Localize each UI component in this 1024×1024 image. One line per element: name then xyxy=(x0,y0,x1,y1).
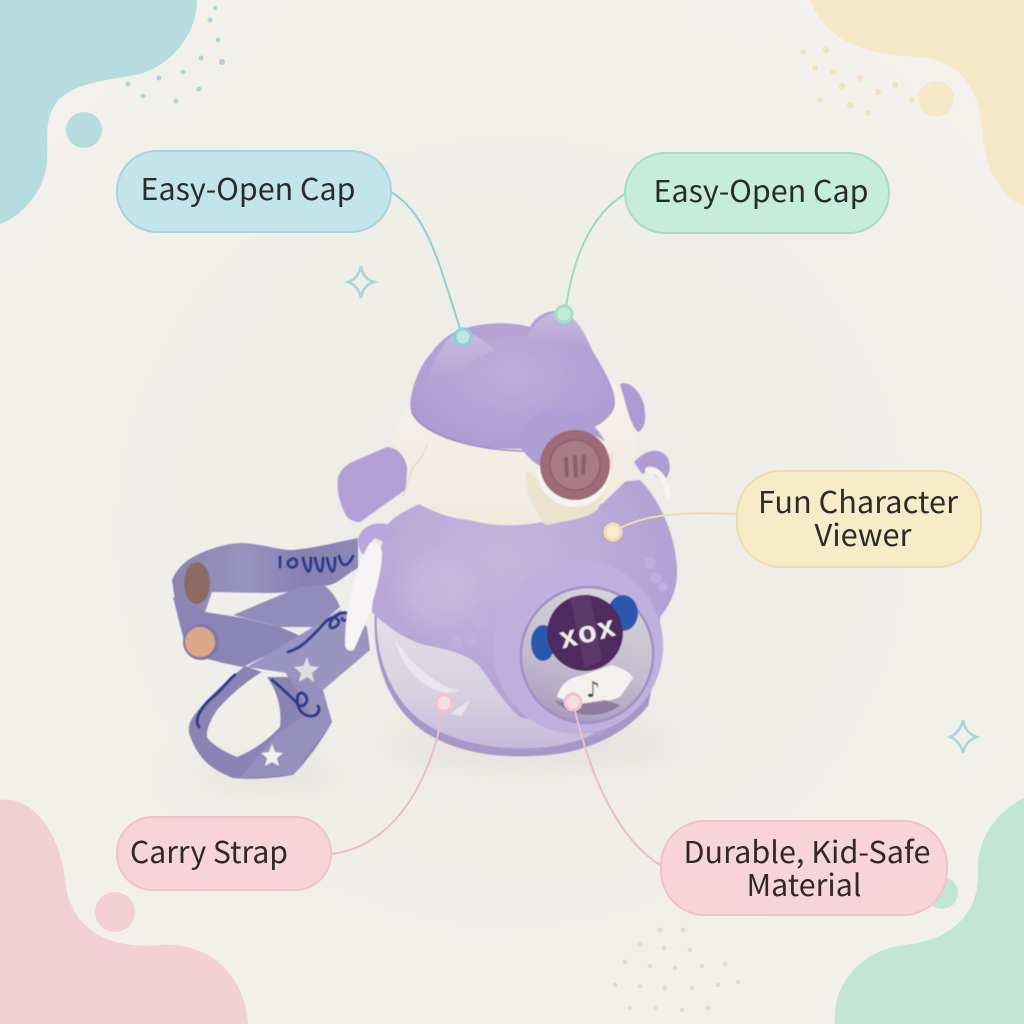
bottle: purple sleeve xyxy=(372,480,677,735)
icon: sparkle right xyxy=(950,720,977,753)
bottle xyxy=(337,311,683,756)
beige clasp xyxy=(526,450,613,525)
strap: lower loop xyxy=(189,666,332,779)
strap: bear prints xyxy=(183,562,219,660)
bottle: bumps xyxy=(451,557,668,649)
label: Durable, Kid-Safe Material: Material xyxy=(746,861,862,905)
left hinge xyxy=(337,447,407,522)
label: Fun Character Viewer xyxy=(737,471,981,567)
lid lip xyxy=(412,413,525,451)
strap: twist xyxy=(247,610,370,690)
connector: durable material xyxy=(565,694,660,865)
blob: bottom right green xyxy=(835,798,1024,1024)
bottle: clear vessel xyxy=(377,615,660,748)
connector: top right cap xyxy=(556,194,625,322)
blob: top left blue xyxy=(0,0,225,224)
headphones xyxy=(531,595,638,661)
strap: blue script xyxy=(197,556,353,727)
label: Fun Character Viewer: Viewer xyxy=(814,511,912,555)
strap: stars xyxy=(261,657,319,766)
viewer window xyxy=(506,572,668,738)
icon: sparkle left xyxy=(348,266,374,298)
strap: fold xyxy=(233,585,340,627)
blob: top right yellow xyxy=(800,0,1024,207)
lid ear left xyxy=(430,332,495,384)
character xyxy=(531,594,638,715)
lower body shadow xyxy=(555,700,620,715)
head reflection xyxy=(570,594,602,668)
dot pattern: bottom xyxy=(612,928,740,1012)
label: Easy-Open Cap left xyxy=(117,151,391,232)
button xyxy=(540,430,610,500)
collar step xyxy=(403,444,427,497)
label: Easy-Open Cap left: Easy-Open Cap xyxy=(140,165,356,209)
label: Easy-Open Cap right xyxy=(625,153,889,233)
label: Durable, Kid-Safe Material xyxy=(661,821,947,915)
white clip xyxy=(345,542,382,651)
bottle: metal rim xyxy=(420,505,555,527)
strap: lower fold xyxy=(240,672,332,778)
connector: top left cap xyxy=(391,192,471,345)
label: Fun Character Viewer: Fun Character xyxy=(758,478,958,522)
strap xyxy=(172,538,370,779)
viewer ring xyxy=(473,541,683,753)
blob: bottom left pink xyxy=(0,800,248,1024)
head xyxy=(547,595,623,671)
connector: character viewer xyxy=(605,513,736,540)
button tube xyxy=(518,408,605,466)
label: Carry Strap xyxy=(117,817,331,890)
strap: top band xyxy=(172,538,358,612)
music note: ♪ xyxy=(586,678,600,703)
bottle: hook xyxy=(358,523,396,556)
lid ear right xyxy=(527,312,592,350)
collar xyxy=(390,378,638,525)
shirt xyxy=(557,665,633,704)
xox: xox xyxy=(556,609,620,655)
white ring xyxy=(537,433,611,507)
bottle: sleeve highlight xyxy=(404,556,476,624)
label: Easy-Open Cap right: Easy-Open Cap xyxy=(654,167,868,211)
label: Carry Strap: Carry Strap xyxy=(130,828,288,872)
bottle: base rim xyxy=(375,612,662,756)
bottle: white side strap xyxy=(648,470,668,498)
bottle: right handle xyxy=(634,451,670,482)
purple lid xyxy=(410,311,615,449)
shadow under bottle and strap xyxy=(185,731,680,785)
right side nub xyxy=(620,383,645,432)
connector: carry strap xyxy=(332,695,452,854)
strap: bear panel xyxy=(173,597,303,667)
bottle: glass reflections xyxy=(395,640,470,716)
label: Durable, Kid-Safe Material: Durable, Kid-Safe xyxy=(684,828,930,872)
